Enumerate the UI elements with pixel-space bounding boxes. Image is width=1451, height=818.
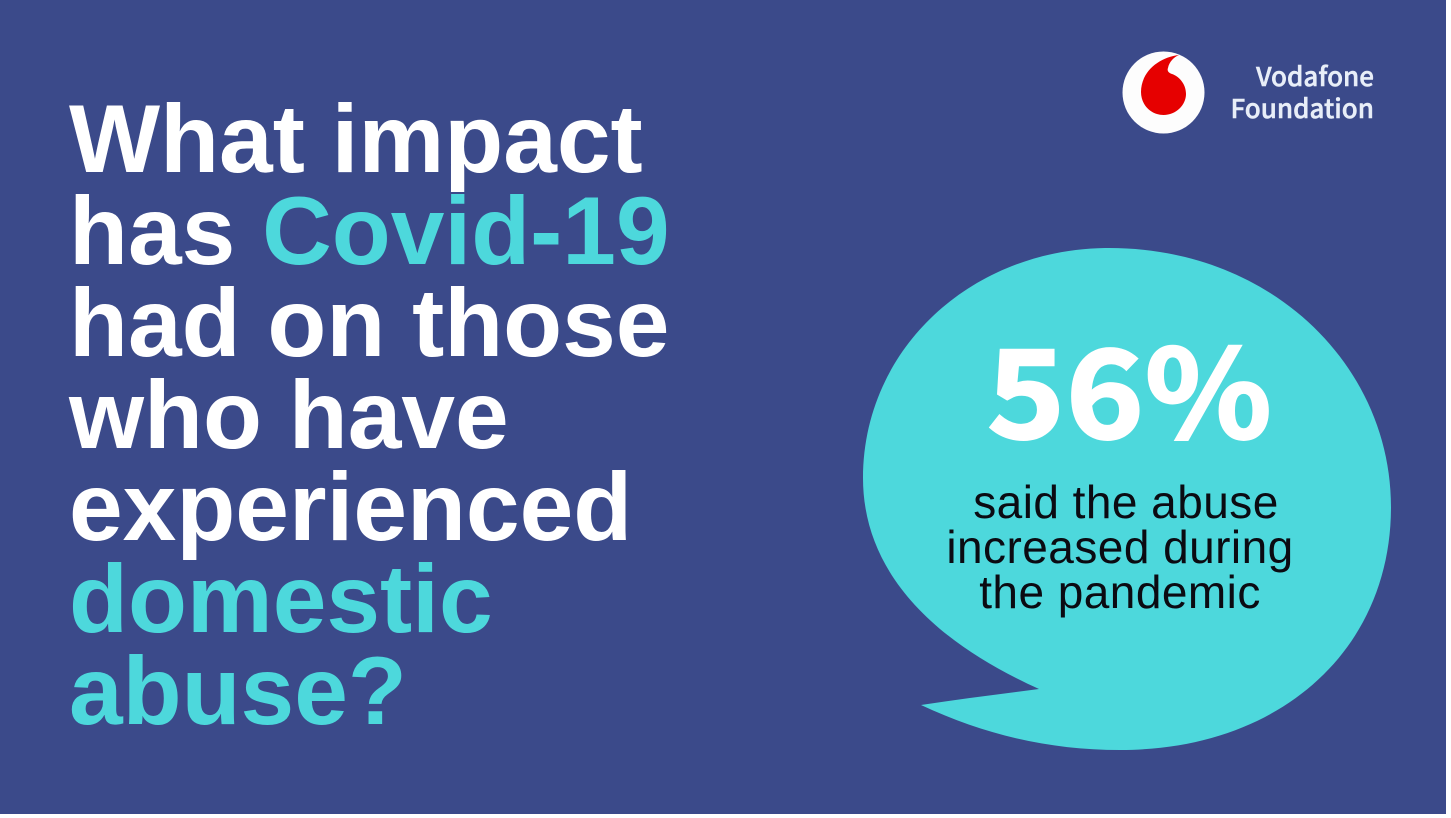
title — [68, 86, 670, 745]
title: domestic — [69, 546, 493, 653]
title: experienced — [69, 454, 632, 561]
logo text — [1230, 57, 1374, 126]
statistic caption: increased during — [946, 521, 1294, 573]
title: had on those — [69, 270, 669, 377]
title: What impact — [69, 86, 643, 193]
statistic: 56%: 56% — [987, 297, 1273, 474]
title: who have — [69, 362, 509, 469]
statistic caption — [946, 476, 1294, 618]
title: has Covid-19 — [69, 178, 670, 285]
icon: Vodafone logo — [1122, 52, 1204, 134]
statistic caption: the pandemic — [979, 566, 1261, 618]
title: abuse? — [69, 638, 407, 745]
statistic caption: said the abuse — [973, 476, 1279, 528]
logo text: Foundation — [1230, 89, 1374, 126]
logo text: Vodafone — [1256, 57, 1374, 94]
